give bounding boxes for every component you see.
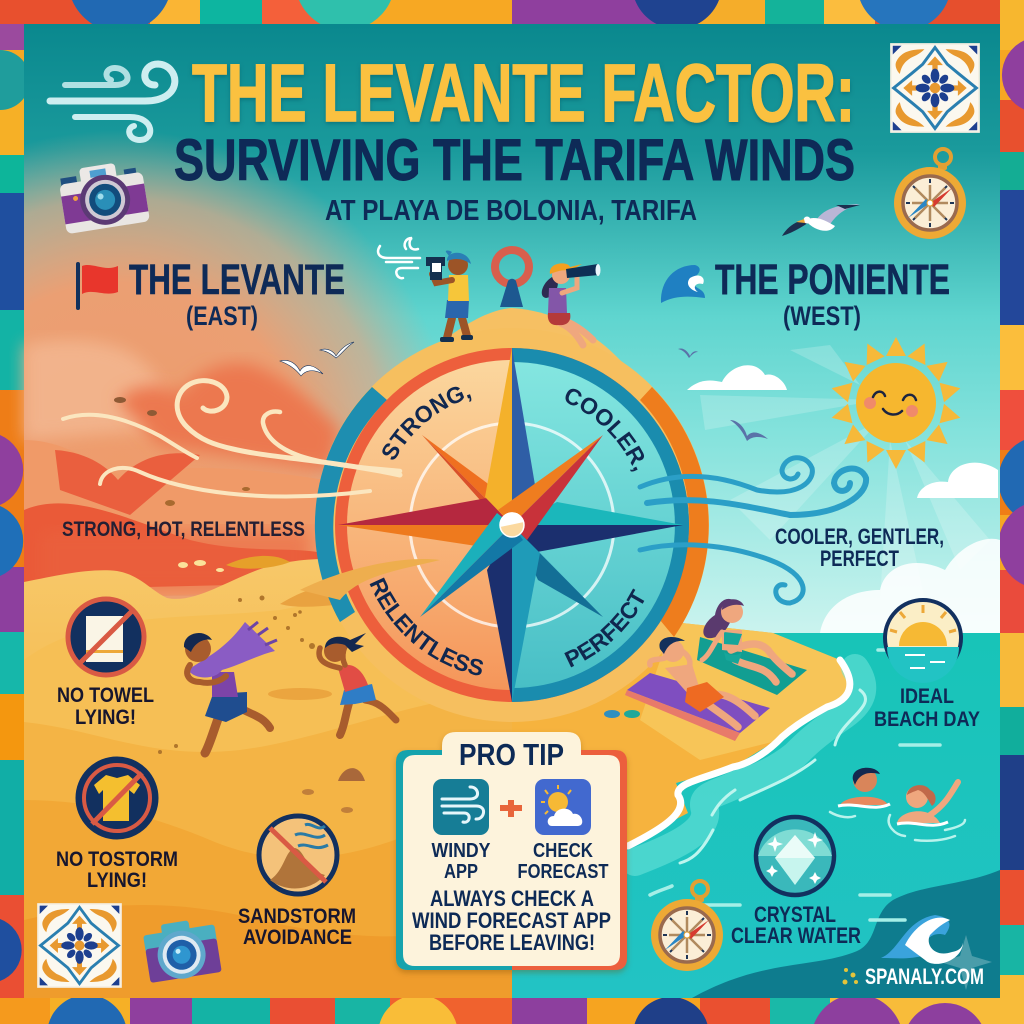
label: sandstorm avoidance: AVOIDANCE bbox=[243, 926, 352, 949]
icon: wind top left bbox=[50, 64, 175, 140]
pro tip heading: PRO TIP bbox=[459, 737, 564, 772]
tip text bbox=[412, 886, 611, 955]
icon: compass bottom bbox=[651, 881, 723, 971]
panel: sand dunes bbox=[24, 556, 853, 998]
east label: (EAST) bbox=[186, 301, 258, 331]
label: cooler gentler perfect: COOLER, GENTLER, bbox=[775, 524, 944, 549]
sand ring and hill bbox=[405, 308, 660, 480]
panel: wind compass bbox=[314, 308, 709, 722]
levante wind swirls bbox=[63, 381, 400, 497]
app labels: WINDY bbox=[432, 840, 491, 862]
icon: forecast app bbox=[535, 779, 591, 835]
label: crystal clear water: CLEAR WATER bbox=[731, 923, 861, 948]
compass rose star bbox=[338, 348, 683, 702]
tip text: ALWAYS CHECK A bbox=[430, 886, 594, 911]
app labels: APP bbox=[444, 861, 478, 883]
sand wisp bbox=[300, 559, 440, 600]
icon: red flag bbox=[76, 262, 118, 310]
poniente wind swirls bbox=[640, 458, 866, 603]
outer teal arc west bbox=[315, 387, 387, 622]
arc label strong: STRONG, bbox=[382, 386, 472, 460]
app labels bbox=[432, 840, 608, 883]
label: no towel lying bbox=[57, 684, 154, 729]
tip text: WIND FORECAST APP bbox=[412, 908, 611, 933]
tip text: BEFORE LEAVING! bbox=[429, 930, 595, 955]
panel: right sky clouds and sun rays bbox=[687, 345, 1000, 633]
panel: levante hot sky bbox=[24, 340, 340, 600]
icon: seagull bbox=[782, 204, 860, 236]
icon: ring buoy marker bbox=[495, 250, 529, 307]
location line: AT PLAYA DE BOLONIA, TARIFA bbox=[325, 195, 697, 227]
heading: levante: THE LEVANTE bbox=[129, 256, 345, 304]
heading: poniente: THE PONIENTE bbox=[715, 256, 950, 304]
figure: woman shielding face bbox=[319, 633, 396, 735]
icon: compass top right bbox=[894, 149, 966, 239]
label: sandstorm avoidance bbox=[238, 905, 356, 949]
man bbox=[705, 694, 755, 727]
icon: tile bottom left bbox=[38, 904, 121, 987]
label: no tostorm lying: NO TOSTORM bbox=[56, 848, 178, 871]
label: ideal beach day: BEACH DAY bbox=[874, 708, 980, 731]
icon: no towel bbox=[68, 599, 144, 675]
label: crystal clear water: CRYSTAL bbox=[754, 902, 836, 927]
figure: photographer on hill bbox=[378, 238, 473, 342]
flip flops bbox=[604, 710, 620, 718]
label: no towel lying: LYING! bbox=[75, 706, 136, 729]
app labels: CHECK bbox=[533, 840, 593, 862]
app labels: FORECAST bbox=[518, 861, 608, 883]
icon: camera top left bbox=[57, 159, 150, 234]
towel purple bbox=[627, 673, 770, 733]
figure: sunbathers bbox=[604, 599, 807, 741]
icon: plus bbox=[500, 800, 522, 817]
heading: poniente bbox=[661, 256, 950, 331]
icon: no shirt bbox=[78, 759, 156, 837]
icon: wave bbox=[661, 265, 705, 303]
icon: smiling sun bbox=[829, 337, 963, 469]
label: ideal beach day bbox=[874, 685, 980, 731]
label: crystal clear water bbox=[731, 902, 861, 948]
panel: sea bbox=[512, 633, 1000, 998]
woman bbox=[703, 599, 737, 638]
figure: woman with telescope bbox=[542, 263, 600, 345]
icon: ideal beach day bbox=[885, 600, 961, 683]
label: cooler gentler perfect bbox=[775, 524, 944, 571]
figure: man with towel bbox=[184, 622, 277, 753]
label: no towel lying: NO TOWEL bbox=[57, 684, 154, 707]
title bbox=[174, 48, 855, 227]
label: cooler gentler perfect: PERFECT bbox=[820, 546, 899, 571]
arc label perfect: PERFECT bbox=[564, 588, 644, 668]
arc label cooler: COOLER, bbox=[566, 388, 644, 472]
icon: camera bottom bbox=[142, 916, 222, 984]
icon: no sandstorm bbox=[259, 816, 337, 894]
label: no tostorm lying: LYING! bbox=[87, 869, 147, 892]
shoreline waves bbox=[628, 650, 950, 920]
logo: wave and site name bbox=[842, 915, 992, 990]
outer orange arc east bbox=[640, 387, 709, 637]
label: no tostorm lying bbox=[56, 848, 178, 892]
towel teal bbox=[697, 637, 807, 695]
heading: levante bbox=[76, 256, 345, 331]
icon: birds bbox=[280, 342, 768, 441]
figure: swimmers bbox=[830, 768, 965, 841]
icon: tile top right bbox=[891, 44, 979, 132]
label: strong hot relentless: STRONG, HOT, RELENTLESS bbox=[62, 518, 305, 541]
icon: windy app bbox=[433, 779, 489, 835]
west label: (WEST) bbox=[783, 301, 861, 331]
icon: crystal clear water bbox=[756, 817, 834, 895]
panel: pro tip bbox=[396, 732, 627, 970]
site name: SPANALY.COM bbox=[865, 964, 984, 989]
label: ideal beach day: IDEAL bbox=[900, 685, 954, 708]
label: sandstorm avoidance: SANDSTORM bbox=[238, 905, 356, 928]
arc label relentless: RELENTLESS bbox=[370, 578, 484, 676]
